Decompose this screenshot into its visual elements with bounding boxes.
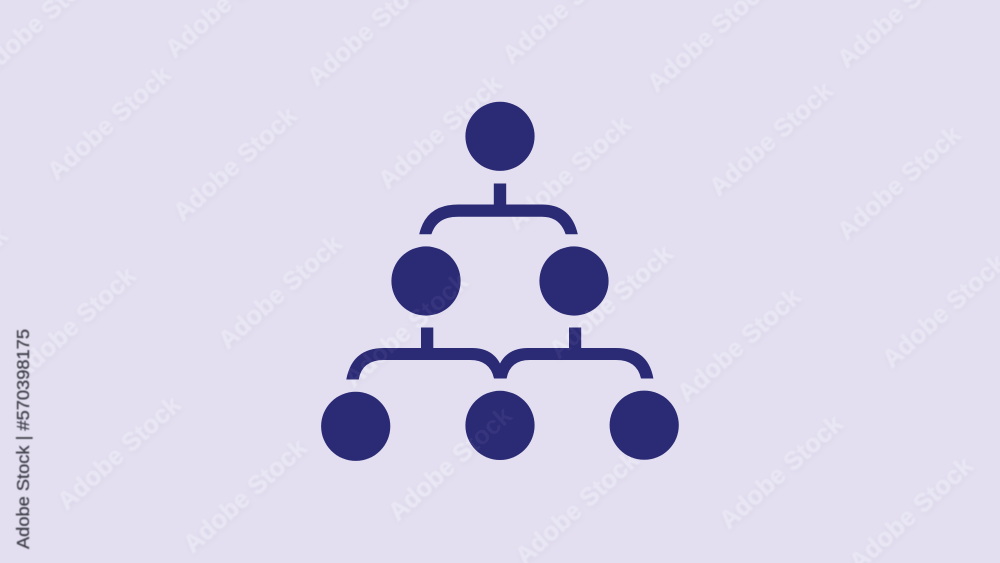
node: top — [465, 102, 535, 171]
node: bottom middle — [465, 391, 535, 460]
watermarks: Adobe Stock — [339, 267, 474, 393]
watermarks: Adobe Stock — [178, 433, 313, 559]
watermarks: Adobe Stock — [502, 110, 637, 236]
node: bottom right — [610, 391, 679, 460]
connector: right stem and branch — [500, 328, 653, 378]
watermarks: Adobe Stock — [704, 76, 839, 202]
stock id caption: Adobe Stock | #570398175 — [13, 329, 33, 549]
watermarks: Adobe Stock — [213, 229, 348, 355]
watermarks: Adobe Stock — [42, 60, 177, 186]
watermarks over icon — [339, 239, 679, 527]
node: middle right — [539, 246, 609, 316]
watermarks: Adobe Stock — [7, 261, 142, 387]
watermarks over icon: Adobe Stock — [383, 401, 518, 527]
connector: left stem and branch — [346, 328, 500, 380]
node: bottom left — [321, 392, 390, 461]
watermarks over icon: Adobe Stock — [544, 239, 679, 365]
connector: top stem and branch — [419, 184, 578, 234]
watermarks: Adobe Stock — [52, 390, 187, 516]
node: middle left — [391, 246, 461, 316]
watermarks: Adobe Stock — [373, 69, 508, 195]
watermarks: Adobe Stock — [168, 101, 303, 227]
watermarks: Adobe Stock — [714, 409, 849, 535]
watermarks: Adobe Stock — [383, 401, 518, 527]
watermarks: Adobe Stock — [672, 282, 807, 408]
icon: hierarchy tree — [321, 102, 679, 461]
watermarks: Adobe Stock — [832, 120, 967, 246]
watermarks: Adobe Stock — [544, 239, 679, 365]
watermarks over icon: Adobe Stock — [339, 267, 474, 393]
